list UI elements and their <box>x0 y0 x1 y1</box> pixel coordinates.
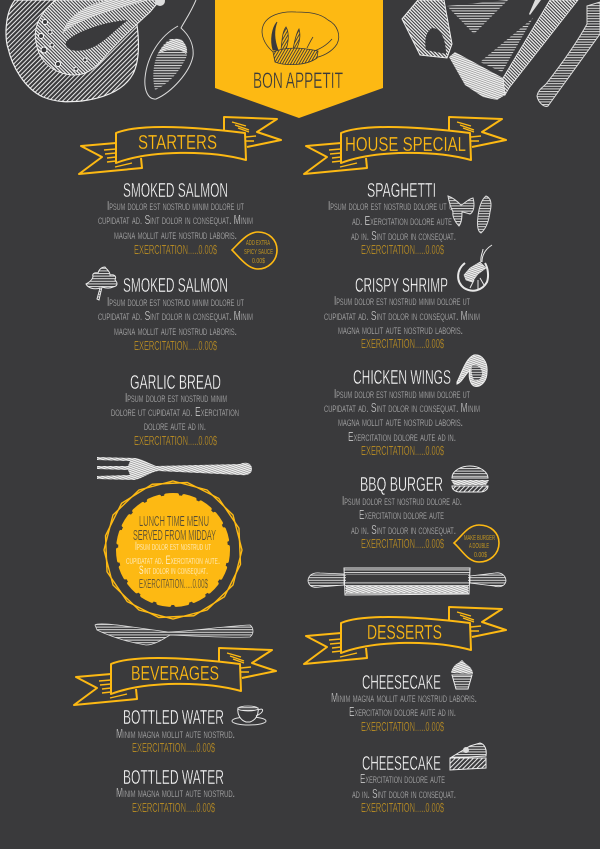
ribbon: beverages <box>74 648 276 705</box>
menu item: spaghetti <box>328 180 473 257</box>
icon: coffee cup <box>232 706 266 725</box>
menu item: cheesecake 2: EXERCITATION.....0.00$ <box>361 800 444 815</box>
menu item: garlic bread: dolore aute ad in. <box>144 418 206 433</box>
menu item: chicken wings: Ipsum dolor est nostrud minim dolore ut <box>334 386 470 401</box>
illustration: folded cloth <box>402 0 578 100</box>
callout: make burger a double: A DOUBLE <box>469 543 489 550</box>
menu item: bottled water 1 <box>116 707 235 755</box>
menu item: smoked salmon 1 <box>98 180 253 257</box>
menu item: bottled water 2: EXERCITATION.....0.00$ <box>132 800 215 815</box>
badge text: LUNCH TIME MENU <box>139 514 209 530</box>
menu item: bbq burger <box>342 474 462 551</box>
illustration: mortar and pestle <box>6 0 165 102</box>
menu item: garlic bread: EXERCITATION.....0.00$ <box>134 433 217 448</box>
menu item: cheesecake 1: EXERCITATION.....0.00$ <box>361 719 444 734</box>
ribbon label: BEVERAGES <box>131 663 219 685</box>
menu item: cheesecake 2: Exercitation dolore aute <box>360 771 445 786</box>
ribbon: house special <box>304 117 506 174</box>
menu item: smoked salmon 1: Ipsum dolor est nostrud minim dolore ut <box>107 198 244 213</box>
badge text: Sint dolor in consequat. <box>139 563 208 577</box>
menu item: smoked salmon 1: cupidatat ad. Sint dolor in consequat. Minim <box>98 212 253 227</box>
menu item: smoked salmon 2: Ipsum dolor est nostrud minim dolore ut <box>107 294 244 309</box>
menu item: crispy shrimp: magna mollit aute nostrud laboris. <box>338 322 463 337</box>
menu item: bbq burger: Exercitation dolore aute <box>359 507 444 522</box>
callout: add extra spicy sauce: 0.00$ <box>252 258 265 265</box>
badge outer polygon frame <box>91 468 255 632</box>
ribbon: starters <box>79 117 281 174</box>
icon: pasta <box>448 196 491 233</box>
menu item: cheesecake 1: Minim magna mollit aute nostrud laboris. <box>331 690 477 705</box>
menu item: bottled water 1: BOTTLED WATER <box>123 707 224 729</box>
illustration: spoon <box>145 0 196 99</box>
menu item: chicken wings: cupidatat ad. Sint dolor in consequat. Minim <box>324 400 480 415</box>
menu item: bottled water 2: BOTTLED WATER <box>123 767 224 789</box>
illustration: table knife <box>95 624 253 645</box>
menu item: bbq burger: BBQ BURGER <box>360 474 443 496</box>
menu item: smoked salmon 2: magna mollit aute nostrud laboris. <box>114 323 237 338</box>
menu item: smoked salmon 1: magna mollit aute nostrud laboris. <box>114 227 237 242</box>
menu item: cheesecake 2: CHEESECAKE <box>362 753 441 775</box>
callout: make burger a double: MAKE BURGER <box>464 535 495 542</box>
menu item: spaghetti: ad in. Sint dolor in consequat. <box>351 228 456 243</box>
menu item: spaghetti: EXERCITATION.....0.00$ <box>361 242 444 257</box>
badge text: SERVED FROM MIDDAY <box>133 528 216 544</box>
callout: add extra spicy sauce: ADD EXTRA <box>246 240 270 247</box>
menu item: bottled water 1: EXERCITATION.....0.00$ <box>132 740 215 755</box>
lunch badge <box>91 468 255 632</box>
menu item: crispy shrimp <box>324 275 480 351</box>
illustration: knife handle <box>537 2 600 106</box>
menu item: spaghetti: Ipsum dolor est nostrud dolore ut cupidat <box>328 198 473 213</box>
menu item: smoked salmon 2: EXERCITATION.....0.00$ <box>134 338 217 353</box>
menu item: cheesecake 1 <box>331 672 477 734</box>
menu item: chicken wings: CHICKEN WINGS <box>353 367 451 389</box>
callout: make burger a double: 0.00$ <box>474 552 487 559</box>
menu item: garlic bread: Ipsum dolor est nostrud minim <box>125 390 227 405</box>
badge text <box>126 514 220 591</box>
menu item: bottled water 2 <box>116 767 235 815</box>
menu item: crispy shrimp: CRISPY SHRIMP <box>355 275 448 297</box>
menu item: smoked salmon 2: cupidatat ad. Sint dolor in consequat. Minim <box>98 308 253 323</box>
menu item: smoked salmon 2: SMOKED SALMON <box>123 275 228 297</box>
menu item: bottled water 2: Minim magna mollit aute nostrud. <box>116 785 235 800</box>
badge text: cupidatat ad. Exercitation aute. <box>126 553 220 567</box>
title: Bon Appetit: BON APPETIT <box>253 68 343 93</box>
ribbon: desserts <box>304 607 506 664</box>
icon: chef hat <box>262 12 339 65</box>
illustration: fork <box>97 457 252 480</box>
menu item: spaghetti: ad. Exercitation dolore aute <box>352 213 452 228</box>
menu item: garlic bread: GARLIC BREAD <box>130 372 221 394</box>
menu item: crispy shrimp: EXERCITATION.....0.00$ <box>361 336 444 351</box>
icon: cake slice <box>450 743 486 770</box>
badge text: Ipsum dolor est nostrud ut <box>135 539 211 553</box>
callout: add extra spicy sauce: SPICY SAUCE <box>244 249 273 256</box>
menu item: bottled water 1: Minim magna mollit aute nostrud. <box>116 726 235 741</box>
menu item: bbq burger: EXERCITATION.....0.00$ <box>361 536 444 551</box>
menu item: bbq burger: Ipsum dolor est nostrud dolore ad. <box>342 493 462 508</box>
ribbon label: HOUSE SPECIAL <box>345 134 466 156</box>
ribbon label: DESSERTS <box>367 622 442 644</box>
menu item: bbq burger: ad in. Sint dolor in consequat. <box>351 522 456 537</box>
menu item: chicken wings: magna mollit aute nostrud laboris. <box>338 414 463 429</box>
icon: shrimp <box>458 245 492 291</box>
menu item: chicken wings: EXERCITATION.....0.00$ <box>361 443 444 458</box>
icon: chicken wing <box>457 355 487 386</box>
menu item: smoked salmon 2 <box>98 275 253 353</box>
menu item: chicken wings: Exercitation dolore aute ad in. <box>348 429 456 444</box>
menu item: garlic bread <box>111 372 239 448</box>
badge scalloped disc <box>118 495 228 605</box>
menu item: garlic bread: dolore ut cupidatat ad. Exercitation <box>111 404 239 419</box>
callout: make burger a double <box>454 525 499 562</box>
menu item: cheesecake 1: CHEESECAKE <box>362 672 441 694</box>
menu item: cheesecake 2 <box>352 753 456 815</box>
icon: cupcake <box>451 660 473 689</box>
menu item: chicken wings <box>324 367 480 458</box>
illustration: rolling pin <box>308 568 506 595</box>
menu item: smoked salmon 1: SMOKED SALMON <box>123 180 228 202</box>
icon: parsley leaf <box>86 267 117 300</box>
badge text: EXERCITATION.....0.00$ <box>139 577 208 591</box>
ribbon label: STARTERS <box>138 132 217 154</box>
header banner <box>215 0 383 118</box>
menu item: cheesecake 1: Exercitation dolore aute ad in. <box>349 704 456 719</box>
callout: add extra spicy sauce <box>232 232 277 269</box>
menu item: crispy shrimp: Ipsum dolor est nostrud minim dolore ut <box>334 293 470 308</box>
menu item: spaghetti: SPAGHETTI <box>367 180 436 202</box>
menu item: cheesecake 2: ad in. Sint dolor in consequat. <box>352 786 456 801</box>
menu item: crispy shrimp: cupidatat ad. Sint dolor in consequat. Minim <box>324 308 480 323</box>
menu item: smoked salmon 1: EXERCITATION.....0.00$ <box>134 242 217 257</box>
icon: burger <box>451 466 489 492</box>
banner shape <box>215 0 383 118</box>
